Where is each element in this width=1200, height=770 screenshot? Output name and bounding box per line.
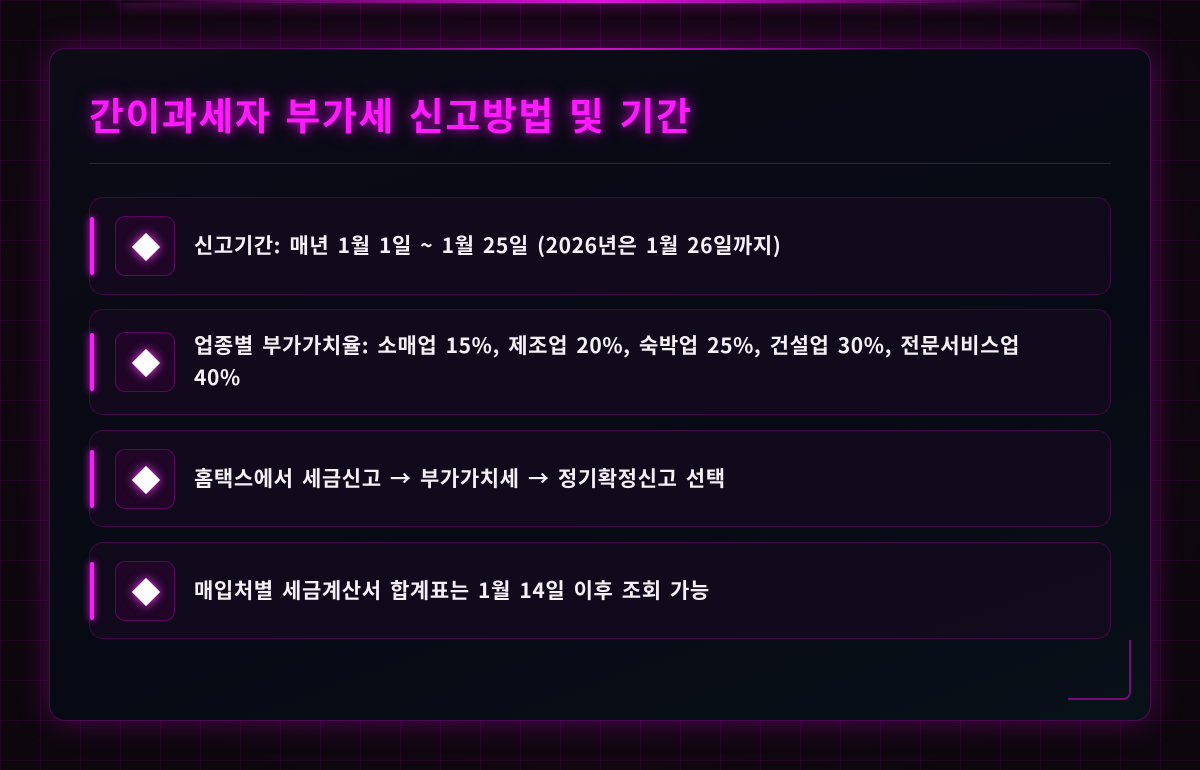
title: 간이과세자 부가세 신고방법 및 기간 (89, 86, 692, 141)
item: 업종별 부가가치율 (89, 309, 1111, 415)
icon: diamond (115, 332, 175, 392)
icon: diamond (115, 216, 175, 276)
icon: diamond (115, 561, 175, 621)
item: 매입처별 (89, 542, 1111, 639)
icon: diamond (115, 449, 175, 509)
text: period: 신고기간: 매년 1월 1일 ~ 1월 25일 (2026년은 1월 26일까지) (194, 230, 781, 260)
item: 신고기간 (89, 197, 1111, 295)
item: 홈택스 (89, 430, 1111, 527)
text: hometax: 홈택스에서 세금신고 → 부가가치세 → 정기확정신고 선택 (194, 463, 726, 493)
text: invoices: 매입처별 세금계산서 합계표는 1월 14일 이후 조회 가능 (194, 575, 710, 605)
text: rates: 업종별 부가가치율: 소매업 15%, 제조업 20%, 숙박업 25%, 건설업 30%, 전문서비스업 40% (194, 330, 1020, 392)
